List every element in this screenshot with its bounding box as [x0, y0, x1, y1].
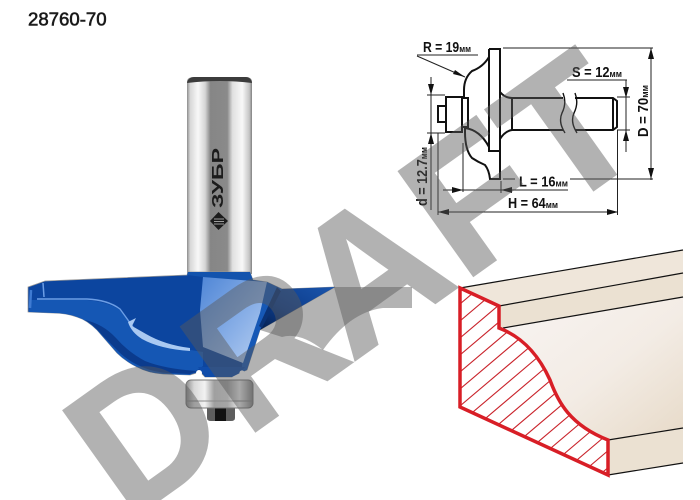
dimension labels: R = 19мм	[423, 40, 471, 56]
dark wing	[260, 287, 335, 330]
dimension labels: L = 16мм	[519, 174, 568, 190]
moulding curved face	[499, 297, 683, 440]
bearing	[186, 380, 253, 408]
dimension labels: S = 12мм	[572, 65, 622, 81]
blue cutter body	[28, 272, 335, 377]
shank	[187, 77, 252, 274]
wood moulding profile	[458, 249, 684, 478]
moulding top strip	[460, 250, 683, 306]
dimension labels: D = 70мм	[636, 85, 652, 137]
dimension labels: H = 64мм	[508, 196, 558, 212]
screw	[207, 406, 235, 421]
title: article number: 28760-70	[28, 8, 107, 30]
brand logo on shank	[210, 148, 228, 230]
moulding bottom strip	[608, 428, 683, 475]
moulding upper step	[499, 273, 683, 328]
dimension labels	[415, 40, 652, 212]
hatched cross-section	[458, 285, 610, 478]
watermark: shadow band right of the wing	[260, 287, 412, 350]
dimension arrowheads	[428, 48, 654, 215]
shoulder collar	[187, 272, 267, 282]
blade highlights	[37, 299, 133, 327]
technical dimension drawing	[415, 40, 654, 215]
right blue flank	[242, 282, 282, 372]
light facet	[200, 277, 267, 363]
dimension labels: d = 12.7мм	[415, 147, 431, 206]
lower blade band	[29, 300, 203, 375]
hub between notches	[198, 367, 245, 377]
dimension lines	[417, 48, 653, 215]
brand logo on shank: ЗУБР	[210, 148, 227, 208]
router bit photo	[28, 77, 335, 421]
bit outline	[438, 49, 617, 179]
